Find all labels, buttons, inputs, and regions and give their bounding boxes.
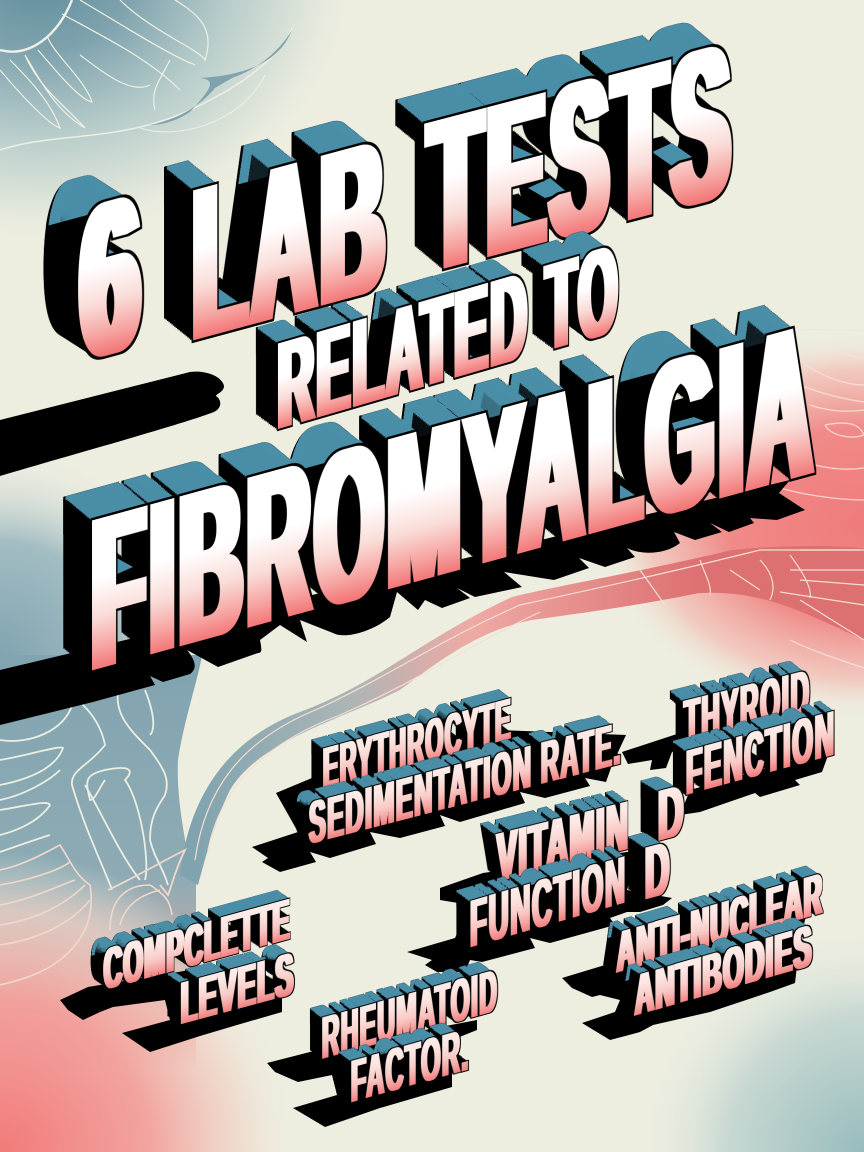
letter: lower D: D <box>645 824 671 916</box>
label: vitamin d function d <box>456 770 686 962</box>
line: FACTOR.: FACTOR. <box>351 1015 470 1115</box>
title word: TESTS: TESTS <box>429 0 735 319</box>
line: ERYTHROCYTE: ERYTHROCYTE <box>323 686 512 802</box>
line: FACTOR.: FACTOR. <box>351 1015 470 1115</box>
cast shadow: complement levels <box>60 960 282 1052</box>
line: ANTIBODIES: ANTIBODIES <box>635 913 813 1029</box>
title line: FIBROMYALGIA: FIBROMYALGIA <box>92 276 816 717</box>
label: anti-nuclear antibodies <box>603 861 824 1029</box>
line: LEVELS: LEVELS <box>181 940 295 1037</box>
line: SEDIMENTATION RATE.: SEDIMENTATION RATE. <box>309 709 622 857</box>
title line: RELATED TO: RELATED TO <box>278 219 620 456</box>
title line: FIBROMYALGIA: FIBROMYALGIA <box>92 276 816 717</box>
line: FACTOR.: FACTOR. <box>351 1015 470 1115</box>
title <box>43 0 816 717</box>
cast shadow: erythrocyte sedimentation rate <box>252 730 626 872</box>
line: FENCTION: FENCTION <box>686 696 836 809</box>
line: VITAMIN: VITAMIN <box>497 786 630 897</box>
title line: FIBROMYALGIA: FIBROMYALGIA <box>92 276 816 717</box>
line: FUNCTION: FUNCTION <box>470 841 627 962</box>
line: ANTIBODIES: ANTIBODIES <box>635 913 813 1029</box>
letter: upper D: D <box>658 770 686 857</box>
line: FENCTION: FENCTION <box>686 696 836 809</box>
line: ERYTHROCYTE: ERYTHROCYTE <box>323 686 512 802</box>
line: THYROID: THYROID <box>684 655 811 759</box>
title word: TESTS: TESTS <box>429 0 735 319</box>
line: LEVELS: LEVELS <box>181 940 295 1037</box>
anatomy lower lines <box>0 845 172 985</box>
line: THYROID: THYROID <box>684 655 811 759</box>
line: ANTI-NUCLEAR: ANTI-NUCLEAR <box>617 861 823 986</box>
title word: 6: 6 <box>81 147 145 407</box>
line: FUNCTION: FUNCTION <box>470 841 627 962</box>
line: SEDIMENTATION RATE.: SEDIMENTATION RATE. <box>309 709 622 857</box>
muscle band <box>180 546 864 885</box>
letter: upper D: D <box>658 770 686 857</box>
line: RHEUMATOID: RHEUMATOID <box>322 956 498 1072</box>
line: FACTOR.: FACTOR. <box>351 1015 470 1115</box>
line: ANTI-NUCLEAR: ANTI-NUCLEAR <box>617 861 823 986</box>
label: thyroid function <box>670 655 836 809</box>
line: RHEUMATOID: RHEUMATOID <box>322 956 498 1072</box>
cast shadow: top band <box>0 372 224 476</box>
line: SEDIMENTATION RATE.: SEDIMENTATION RATE. <box>309 709 622 857</box>
line: VITAMIN: VITAMIN <box>497 786 630 897</box>
title word: TESTS: TESTS <box>429 0 735 319</box>
line: RHEUMATOID: RHEUMATOID <box>322 956 498 1072</box>
letter: lower D: D <box>645 824 671 916</box>
letter: upper D: D <box>658 770 686 857</box>
letter: lower D: D <box>645 824 671 916</box>
muscle fibres <box>195 550 864 860</box>
cast shadow: anti-nuclear antibodies <box>562 900 810 1040</box>
line: FENCTION: FENCTION <box>686 696 836 809</box>
line: COMPCLETTE: COMPCLETTE <box>104 887 291 1003</box>
line: ANTIBODIES: ANTIBODIES <box>635 913 813 1029</box>
title word: LAB: LAB <box>193 91 389 387</box>
title word: TESTS: TESTS <box>429 0 735 319</box>
line: ANTI-NUCLEAR: ANTI-NUCLEAR <box>617 861 823 986</box>
title word: 6: 6 <box>81 147 145 407</box>
line: FUNCTION: FUNCTION <box>470 841 627 962</box>
title line: RELATED TO: RELATED TO <box>278 219 620 456</box>
title line: RELATED TO: RELATED TO <box>278 219 620 456</box>
line: SEDIMENTATION RATE.: SEDIMENTATION RATE. <box>309 709 622 857</box>
line: LEVELS: LEVELS <box>181 940 295 1037</box>
title word: LAB: LAB <box>193 91 389 387</box>
teal anatomy panel <box>0 655 202 1070</box>
title word: 6: 6 <box>81 147 145 407</box>
line: VITAMIN: VITAMIN <box>497 786 630 897</box>
line: FUNCTION: FUNCTION <box>470 841 627 962</box>
line: FENCTION: FENCTION <box>686 696 836 809</box>
line: THYROID: THYROID <box>684 655 811 759</box>
jellyfish line art <box>0 0 292 150</box>
title word: LAB: LAB <box>193 91 389 387</box>
label: rheumatoid factor <box>310 956 498 1115</box>
title line: FIBROMYALGIA: FIBROMYALGIA <box>92 276 816 717</box>
label: erythrocyte sedimentation rate <box>296 686 622 857</box>
line: ERYTHROCYTE: ERYTHROCYTE <box>323 686 512 802</box>
label: complement levels <box>90 887 295 1037</box>
anatomy line art <box>0 690 185 895</box>
line: VITAMIN: VITAMIN <box>497 786 630 897</box>
line: COMPCLETTE: COMPCLETTE <box>104 887 291 1003</box>
line: COMPCLETTE: COMPCLETTE <box>104 887 291 1003</box>
letter: upper D: D <box>658 770 686 857</box>
letter: lower D <box>628 824 672 916</box>
right side line art <box>770 329 864 500</box>
line: ERYTHROCYTE: ERYTHROCYTE <box>323 686 512 802</box>
line: ANTI-NUCLEAR: ANTI-NUCLEAR <box>617 861 823 986</box>
cast shadow: vitamin d function d <box>407 850 672 972</box>
letter: upper D <box>640 770 686 857</box>
cast shadow: fibromyalgia <box>0 480 805 725</box>
title line: RELATED TO: RELATED TO <box>278 219 620 456</box>
title word: LAB: LAB <box>193 91 389 387</box>
cast shadow: rheumatoid factor <box>267 1020 477 1127</box>
title word: 6 <box>43 147 145 407</box>
line: RHEUMATOID: RHEUMATOID <box>322 956 498 1072</box>
line: ANTIBODIES: ANTIBODIES <box>635 913 813 1029</box>
cast shadow: thyroid function <box>622 733 830 815</box>
line: COMPCLETTE: COMPCLETTE <box>104 887 291 1003</box>
letter: lower D: D <box>645 824 671 916</box>
line: LEVELS: LEVELS <box>181 940 295 1037</box>
title word: 6: 6 <box>81 147 145 407</box>
line: THYROID: THYROID <box>684 655 811 759</box>
